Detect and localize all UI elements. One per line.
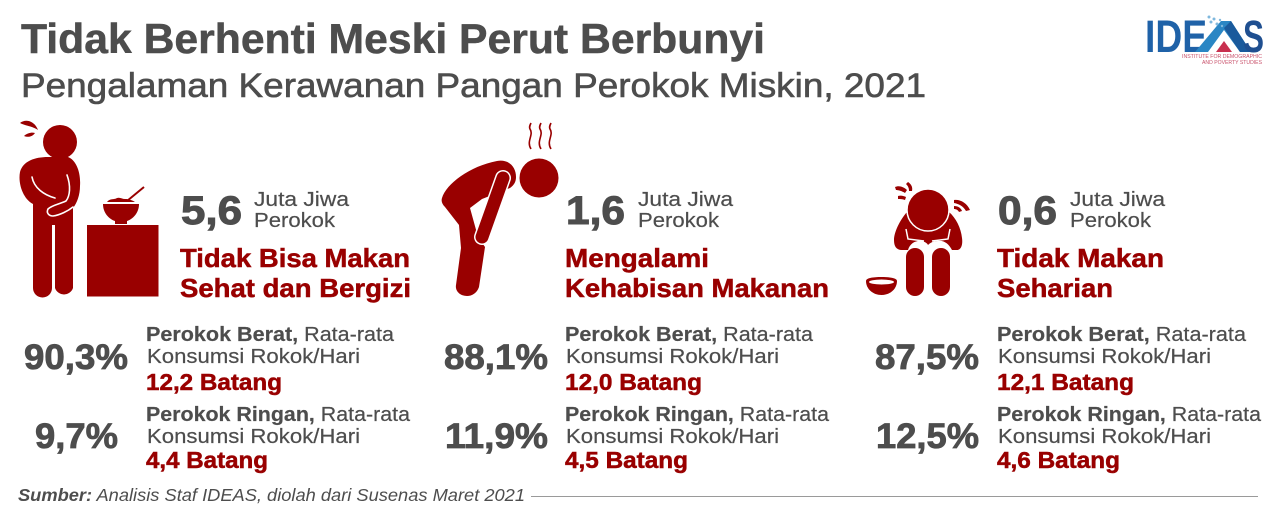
percentage: perokok ringan: 12,5%	[876, 417, 979, 456]
percentage: perokok berat: 88,1%	[444, 338, 548, 377]
detail: perokok ringan: Konsumsi Rokok/Hari	[566, 426, 779, 448]
unit: juta jiwa perokok: Perokok	[254, 210, 336, 232]
heading	[997, 243, 1164, 303]
detail: perokok ringan	[146, 404, 411, 473]
detail: perokok berat: 12,0 Batang	[565, 369, 702, 395]
percentage: perokok berat: 87,5%	[875, 338, 979, 377]
source note: Sumber: Analisis Staf IDEAS, diolah dari Susenas Maret 2021	[18, 485, 525, 505]
detail: perokok ringan: Konsumsi Rokok/Hari	[147, 426, 360, 448]
detail: perokok berat: Konsumsi Rokok/Hari	[566, 346, 779, 368]
detail: perokok ringan: 4,5 Batang	[565, 447, 688, 473]
title: Tidak Berhenti Meski Perut Berbunyi	[21, 15, 765, 62]
detail: perokok berat: 12,2 Batang	[146, 369, 282, 395]
unit: juta jiwa perokok: Juta Jiwa	[1070, 189, 1166, 211]
detail: perokok berat	[997, 324, 1247, 395]
percentage: perokok berat: 90,3%	[24, 338, 128, 377]
panel: kehabisan makanan	[442, 123, 830, 473]
detail: perokok berat: Perokok Berat, Rata-rata	[997, 324, 1247, 346]
stat: 5,6 juta jiwa: 5,6	[181, 189, 242, 233]
heading: Tidak Makan	[997, 243, 1164, 273]
logo: IDEAS: INSTITUTE FOR DEMOGRAPHIC	[1182, 54, 1262, 60]
logo: IDEAS	[1145, 11, 1264, 66]
unit: juta jiwa perokok: Perokok	[638, 210, 720, 232]
icon: hungry person holding stomach beside bowl	[20, 121, 159, 298]
heading	[565, 243, 829, 303]
heading	[180, 243, 411, 303]
unit: juta jiwa perokok: Juta Jiwa	[638, 189, 734, 211]
detail: perokok ringan: Perokok Ringan, Rata-rata	[997, 404, 1262, 426]
logo: IDEAS: S	[1243, 11, 1264, 62]
unit: juta jiwa perokok	[1070, 189, 1166, 232]
subtitle: Pengalaman Kerawanan Pangan Perokok Miskin, 2021	[21, 67, 926, 105]
stat: 1,6 juta jiwa: 1,6	[566, 189, 625, 233]
detail: perokok ringan	[997, 404, 1262, 473]
detail: perokok berat: Perokok Berat, Rata-rata	[146, 324, 395, 346]
logo: IDEAS: IDE	[1145, 11, 1207, 62]
icon: person bent over with dizzy head	[442, 123, 558, 296]
detail: perokok berat: Perokok Berat, Rata-rata	[565, 324, 814, 346]
detail: perokok berat	[146, 324, 395, 395]
detail: perokok berat	[565, 324, 814, 395]
detail: perokok berat: 12,1 Batang	[997, 369, 1134, 395]
heading: Mengalami	[565, 243, 709, 273]
heading: Tidak Bisa Makan	[180, 243, 410, 273]
panel: tidak makan seharian	[866, 182, 1262, 473]
detail: perokok ringan: Perokok Ringan, Rata-rata	[565, 404, 830, 426]
detail: perokok berat: Konsumsi Rokok/Hari	[147, 346, 360, 368]
stat: 0,6 juta jiwa: 0,6	[998, 189, 1057, 233]
unit: juta jiwa perokok	[638, 189, 734, 232]
logo: IDEAS: AND POVERTY STUDIES	[1202, 60, 1263, 66]
panel: tidak bisa makan sehat	[20, 121, 411, 473]
unit: juta jiwa perokok	[254, 189, 350, 232]
detail: perokok ringan: 4,6 Batang	[997, 447, 1120, 473]
heading: Sehat dan Bergizi	[180, 273, 411, 303]
detail: perokok ringan: Perokok Ringan, Rata-rata	[146, 404, 411, 426]
unit: juta jiwa perokok: Perokok	[1070, 210, 1152, 232]
detail: perokok ringan: Konsumsi Rokok/Hari	[998, 426, 1211, 448]
percentage: perokok ringan: 9,7%	[35, 417, 118, 456]
detail: perokok ringan	[565, 404, 830, 473]
unit: juta jiwa perokok: Juta Jiwa	[254, 189, 350, 211]
heading: Seharian	[997, 273, 1113, 303]
icon: person sitting with head on knees and bowl	[866, 182, 970, 296]
percentage: perokok ringan: 11,9%	[445, 417, 548, 456]
heading: Kehabisan Makanan	[565, 273, 829, 303]
detail: perokok berat: Konsumsi Rokok/Hari	[998, 346, 1211, 368]
detail: perokok ringan: 4,4 Batang	[146, 447, 268, 473]
